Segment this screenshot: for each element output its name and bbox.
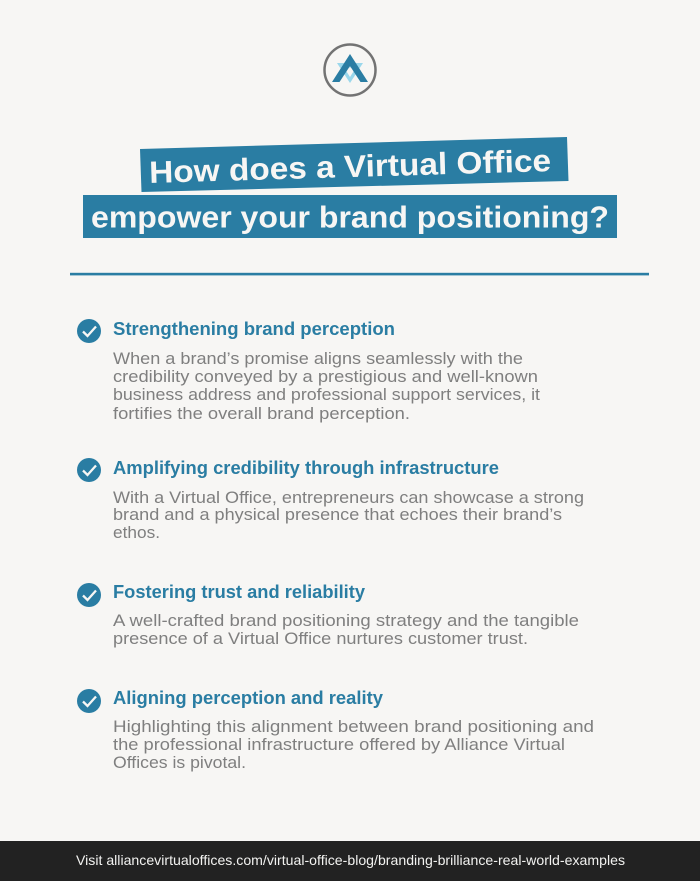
heading: Fostering trust and reliability <box>113 582 365 602</box>
body text: ethos. <box>113 523 160 542</box>
panel: strengthening brand perception <box>77 319 540 423</box>
footer bar: Visit alliancevirtualoffices.com/virtual-office-blog/branding-brilliance-real-world-examples <box>76 852 625 868</box>
body text: business address and professional support services, it <box>113 385 540 404</box>
body text: With a Virtual Office, entrepreneurs can showcase a strong <box>113 488 584 507</box>
title banner: line two: empower your brand positioning? <box>91 200 609 234</box>
body text <box>113 717 594 772</box>
heading: Strengthening brand perception <box>113 319 395 339</box>
panel: fostering trust and reliability <box>77 582 579 648</box>
body text: brand and a physical presence that echoes their brand’s <box>113 505 562 524</box>
body text: fortifies the overall brand perception. <box>113 404 410 423</box>
icon: check badge <box>77 689 101 713</box>
body text: presence of a Virtual Office nurtures customer trust. <box>113 629 528 648</box>
body text: A well-crafted brand positioning strategy and the tangible <box>113 611 579 630</box>
footer bar <box>0 841 700 881</box>
body text: the professional infrastructure offered by Alliance Virtual <box>113 735 565 754</box>
body text: When a brand’s promise aligns seamlessly with the <box>113 349 523 368</box>
body text <box>113 349 540 423</box>
heading: Aligning perception and reality <box>113 688 383 708</box>
body text <box>113 488 584 542</box>
icon: check badge <box>77 458 101 482</box>
title banner: line one: How does a Virtual Office <box>149 143 552 190</box>
title <box>83 137 617 238</box>
body text: credibility conveyed by a prestigious and well-known <box>113 367 538 386</box>
panel: amplifying credibility through infrastructure <box>77 458 584 542</box>
body text: Offices is pivotal. <box>113 753 246 772</box>
icon: Alliance logo <box>324 44 376 96</box>
body text <box>113 611 579 648</box>
body text: Highlighting this alignment between brand positioning and <box>113 717 594 736</box>
icon: check badge <box>77 583 101 607</box>
icon: check badge <box>77 319 101 343</box>
panel: aligning perception and reality <box>77 688 594 772</box>
heading: Amplifying credibility through infrastructure <box>113 458 499 478</box>
